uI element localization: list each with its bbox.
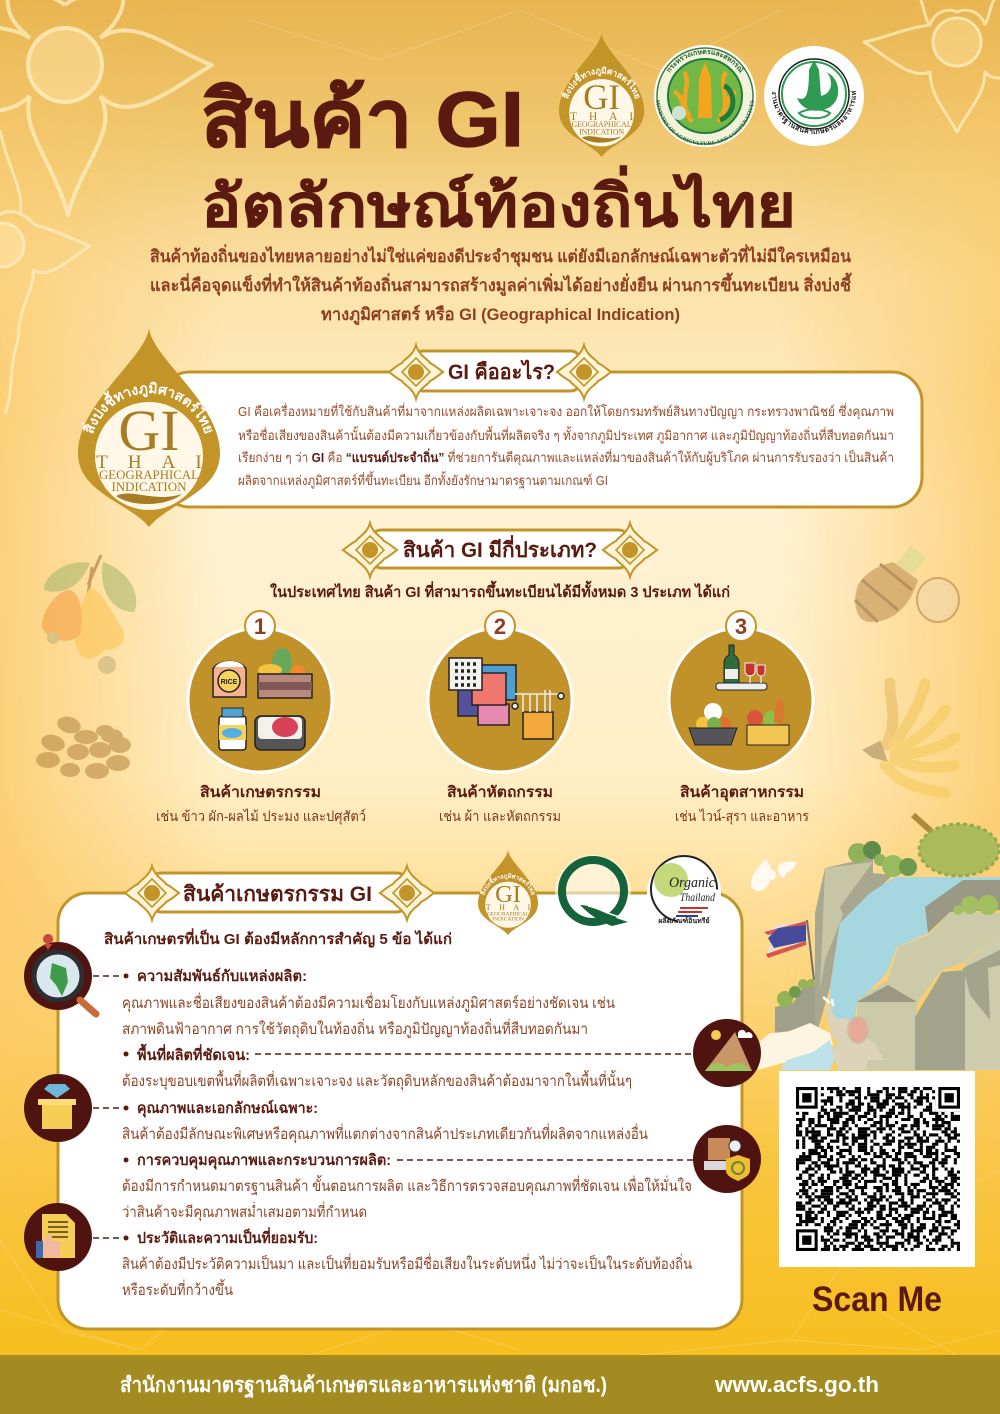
logo: Organic Thailand: ผลิตภัณฑ์อินทรีย์	[658, 916, 710, 925]
heading: how many types: สินค้า GI มีกี่ประเภท?	[403, 534, 597, 562]
logo: Q mark	[555, 855, 631, 931]
category 1 labels: สินค้าเกษตรกรรม	[200, 783, 321, 801]
illustration: taro	[855, 545, 959, 622]
icon: wine bottle and glasses	[716, 645, 767, 690]
category 1: agricultural: 1	[254, 614, 266, 639]
logo: Organic Thailand	[646, 851, 722, 930]
icon: canned fish	[219, 708, 246, 750]
badge: GI Thai (small): INDICATION	[492, 916, 524, 922]
badge: GI Thai (header): สิ่งบ่งชี้ทางภูมิศาสตร์ไทย	[560, 66, 640, 99]
category 2 labels: สินค้าหัตถกรรม	[447, 783, 553, 801]
badge: GI Thai (small): GEOGRAPHICAL	[487, 911, 530, 917]
principle 3	[93, 1099, 648, 1144]
category 1: agricultural	[188, 611, 332, 772]
illustration: bananas	[864, 683, 955, 793]
principle 5: หรือระดับที่กว้างขึ้น	[122, 1279, 233, 1299]
illustration: butterflies	[751, 860, 797, 891]
heading: how many types	[343, 523, 657, 577]
icon: grocery basket	[747, 698, 789, 745]
logo: Organic Thailand: Thailand	[680, 890, 716, 904]
badge: GI Thai (large): GEOGRAPHICAL	[99, 467, 199, 482]
badge: GI Thai (large): สิ่งบ่งชี้ทางภูมิศาสตร์ไทย	[81, 382, 213, 434]
GI body text: ผลิตจากแหล่งภูมิศาสตร์ที่ขึ้นทะเบียน อีกทั้งยังรักษามาตรฐานตามเกณฑ์ GI	[238, 471, 608, 489]
principle 2: พื้นที่ผลิตที่ชัดเจน:	[137, 1043, 250, 1064]
title line 1: สินค้า GI	[201, 75, 524, 163]
illustration: cashew	[42, 555, 136, 674]
intro line: สินค้าเกษตรที่เป็น GI ต้องมีหลักการสำคัญ 5 ข้อ ได้แก่	[104, 928, 452, 948]
GI body text	[238, 403, 894, 489]
panel: agricultural GI	[58, 893, 742, 1329]
badge: GI Thai (header): GI	[583, 76, 620, 117]
principle 5: ประวัติและความเป็นที่ยอมรับ:	[137, 1227, 318, 1247]
QR code	[796, 1087, 960, 1251]
GI body text: เรียกง่าย ๆ ว่า GI คือ “แบรนด์ประจำถิ่น” ที่ช่วยการันตีคุณภาพและแหล่งที่มาของสินค้าให้กับผู้บริโภค ผ่านการรับรองว่า เป็นสินค้า	[238, 448, 894, 466]
principle 1	[93, 967, 615, 1039]
seal: Ministry of Agriculture	[654, 45, 756, 147]
principle 3: สินค้าต้องมีลักษณะพิเศษหรือคุณภาพที่แตกต่างจากสินค้าประเภทเดียวกันที่ผลิตจากแหล่งอื่น	[122, 1123, 648, 1144]
seal: ACFS: สำนักงานมาตรฐานสินค้าเกษตรและอาหารแห่งชาติ	[772, 91, 856, 134]
principle 1: คุณภาพและชื่อเสียงของสินค้าต้องมีความเชื่อมโยงกับแหล่งภูมิศาสตร์อย่างชัดเจน เช่น	[122, 992, 615, 1013]
principle 4: ต้องมีการกำหนดมาตรฐานสินค้า ขั้นตอนการผลิต และวิธีการตรวจสอบคุณภาพที่ชัดเจน เพื่อให้มั่นใจ	[122, 1175, 692, 1196]
category 2 labels: เช่น ผ้า และหัตถกรรม	[439, 808, 561, 824]
category 2 labels	[439, 783, 561, 824]
icon: quality box	[24, 1074, 92, 1142]
principle 2	[122, 1043, 693, 1091]
types intro text: ในประเทศไทย สินค้า GI ที่สามารถขึ้นทะเบียนได้มีทั้งหมด 3 ประเภท ได้แก่	[270, 580, 730, 601]
badge: GI Thai (header): INDICATION	[579, 127, 624, 137]
intro paragraph: ทางภูมิศาสตร์ หรือ GI (Geographical Indication)	[321, 304, 680, 326]
icon: rice sack: RICE	[221, 679, 238, 686]
principle 1: สภาพดินฟ้าอากาศ การใช้วัตถุดิบในท้องถิ่น หรือภูมิปัญญาท้องถิ่นที่สืบทอดกันมา	[122, 1018, 588, 1039]
footer band: www.acfs.go.th	[714, 1372, 879, 1397]
icon: food bowl	[689, 703, 737, 745]
icon: magnifier map	[24, 934, 96, 1014]
heading: what is GI	[389, 345, 611, 399]
category 3 labels: เช่น ไวน์-สุรา และอาหาร	[675, 808, 809, 825]
GI body text: หรือชื่อเสียงของสินค้านั้นต้องมีความเกี่ยวข้องกับพื้นที่ผลิตจริง ๆ ทั้งจากภูมิประเทศ ภูมิอากาศ และภูมิปัญญาท้องถิ่นที่สืบทอดกันมา	[238, 426, 894, 444]
footer band: สำนักงานมาตรฐานสินค้าเกษตรและอาหารแห่งชาติ (มกอช.)	[120, 1373, 607, 1399]
illustration: durian	[913, 815, 999, 876]
badge: GI Thai (small): GI	[495, 881, 521, 908]
heading: agricultural GI	[125, 866, 434, 920]
illustration: waterfall landscape	[758, 815, 1000, 1070]
heading: what is GI: GI คืออะไร?	[448, 359, 555, 384]
intro paragraph	[150, 244, 852, 326]
principle 4	[122, 1151, 693, 1222]
footer band	[0, 1355, 1000, 1414]
intro paragraph: สินค้าท้องถิ่นของไทยหลายอย่างไม่ใช่แค่ของดีประจำชุมชน แต่ยังมีเอกลักษณ์เฉพาะตัวที่ไม่มีใครเหมือน	[150, 244, 851, 267]
seal: Ministry of Agriculture: MINISTRY OF AGRICULTURE AND COOPERATIVES	[656, 100, 754, 146]
icon: crate of produce	[258, 648, 312, 698]
principle 4: การควบคุมคุณภาพและกระบวนการผลิต:	[137, 1151, 391, 1170]
category 2: handicraft: 2	[494, 614, 506, 639]
category 3 labels	[675, 783, 809, 825]
illustration: elephant and river	[758, 997, 884, 1070]
icon: production quality control	[693, 1125, 761, 1193]
illustration: coffee beans	[36, 714, 131, 779]
icon: meat tray	[255, 716, 305, 750]
QR panel	[779, 1071, 975, 1267]
principle 2: ต้องระบุขอบเขตพื้นที่ผลิตที่เฉพาะเจาะจง และวัตถุดิบหลักของสินค้าต้องมาจากในพื้นที่นั้นๆ	[122, 1070, 632, 1091]
category 1 labels	[156, 783, 366, 825]
seal: ACFS	[764, 46, 864, 146]
title line 2: อัตลักษณ์ท้องถิ่นไทย	[201, 165, 796, 239]
decorative lotus: top left	[0, 0, 212, 215]
decorative lotus: top right	[864, 0, 1000, 132]
badge: GI Thai (header): GEOGRAPHICAL	[572, 120, 632, 129]
principle 5	[93, 1227, 692, 1299]
panel: what is GI	[160, 372, 922, 507]
icon: fabric swatches	[449, 658, 516, 725]
category 3: industrial	[669, 611, 813, 772]
category 3 labels: สินค้าอุตสาหกรรม	[680, 783, 804, 802]
principle 4: ว่าสินค้าจะมีคุณภาพสม่ำเสมอตามที่กำหนด	[122, 1201, 367, 1222]
badge: GI Thai (large): INDICATION	[111, 479, 187, 494]
intro paragraph: และนี่คือจุดแข็งที่ทำให้สินค้าท้องถิ่นสามารถสร้างมูลค่าเพิ่มได้อย่างยั่งยืน ผ่านการขึ้นทะเบียน สิ่งบ่งชี้	[150, 272, 852, 297]
category 3: industrial: 3	[735, 614, 747, 639]
badge: GI Thai (large)	[78, 328, 222, 527]
category 2: handicraft	[428, 611, 572, 772]
category 1 labels: เช่น ข้าว ผัก-ผลไม้ ประมง และปศุสัตว์	[156, 808, 366, 825]
badge: GI Thai (small): สิ่งบ่งชี้ทางภูมิศาสตร์ไทย	[479, 873, 535, 896]
icon: loom	[512, 690, 564, 739]
icon: mountain	[693, 1019, 761, 1087]
seal: Ministry of Agriculture: กระทรวงเกษตรและสหกรณ์	[667, 50, 745, 73]
principle 5: สินค้าต้องมีประวัติความเป็นมา และเป็นที่ยอมรับหรือมีชื่อเสียงในระดับหนึ่ง ไม่ว่าจะเป็นในระดับท้องถิ่น	[122, 1253, 692, 1273]
badge: GI Thai (header)	[559, 33, 645, 157]
badge: GI Thai (large): GI	[118, 398, 180, 463]
Scan Me label: Scan Me	[812, 1280, 942, 1319]
GI body text: GI คือเครื่องหมายที่ใช้กับสินค้าที่มาจากแหล่งผลิตเฉพาะเจาะจง ออกให้โดยกรมทรัพย์สินทางปัญญา กระทรวงพาณิชย์ ซึ่งคุณภาพ	[238, 403, 894, 420]
decorative lotus: left lower	[0, 130, 90, 414]
principle 3: คุณภาพและเอกลักษณ์เฉพาะ:	[137, 1099, 318, 1118]
icon: rice sack	[213, 661, 246, 697]
heading: agricultural GI: สินค้าเกษตรกรรม GI	[183, 882, 372, 906]
icon: document thumbs up	[24, 1203, 92, 1271]
badge: GI Thai (header): THAI	[570, 110, 645, 123]
badge: GI Thai (small): THAI	[486, 903, 539, 912]
badge: GI Thai (small)	[478, 850, 539, 935]
principle 1: ความสัมพันธ์กับแหล่งผลิต:	[137, 967, 307, 985]
badge: GI Thai (large): THAI	[96, 452, 222, 473]
logo: Organic Thailand: Organic	[669, 875, 715, 891]
illustration: Thai flag	[764, 920, 814, 980]
